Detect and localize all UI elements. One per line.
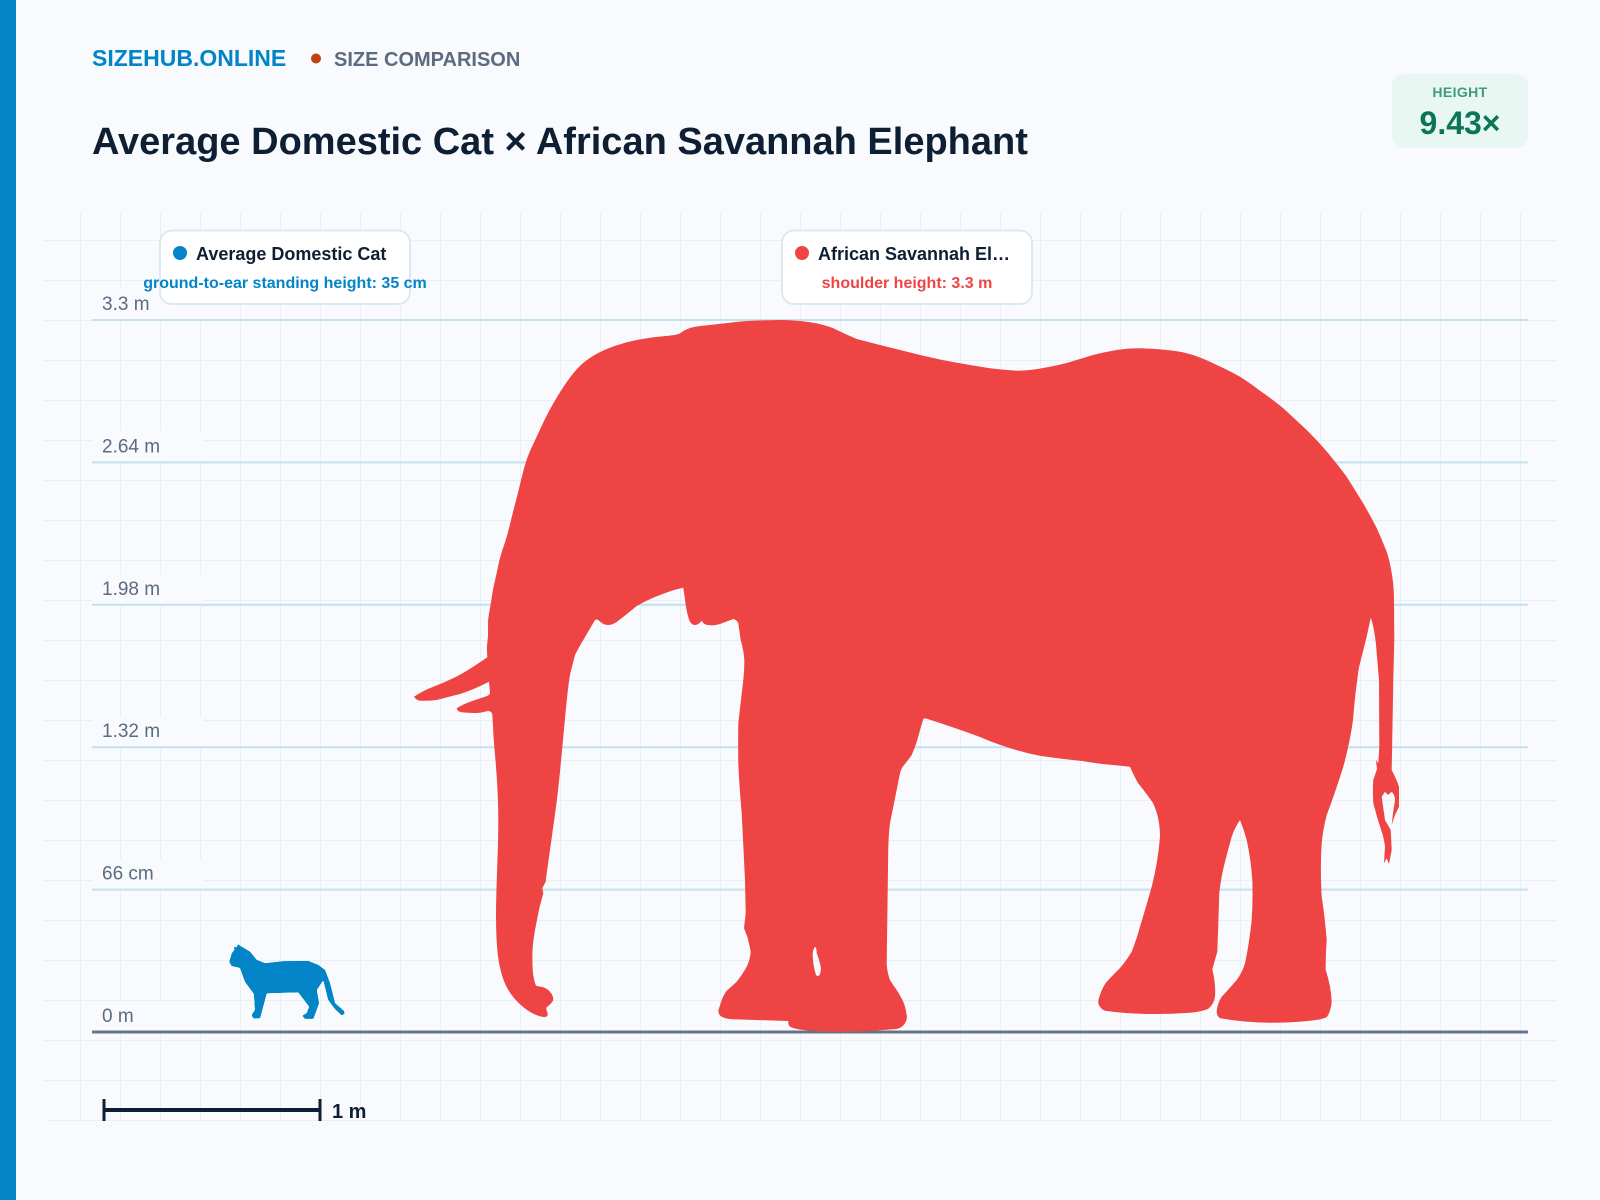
- title: Average Domestic Cat × African Savannah Elephant: [92, 121, 1028, 163]
- height ratio badge: 9.43×: [1420, 105, 1500, 141]
- height ratio badge: HEIGHT: [1432, 84, 1488, 100]
- height ratio badge: [1392, 74, 1528, 148]
- left accent bar: [0, 0, 16, 1200]
- elephant silhouette: [414, 320, 1399, 1032]
- label card: Average Domestic Cat: ground-to-ear standing height: 35 cm: [143, 275, 427, 292]
- label card: African Savannah Elephant: African Savannah El…: [818, 244, 1010, 264]
- label card: African Savannah Elephant: [782, 230, 1032, 304]
- ground line: [92, 1030, 1528, 1034]
- axis reference lines and labels: 3.3 m: [102, 294, 150, 315]
- axis reference lines and labels: 0 m: [102, 1006, 134, 1027]
- header brand line: SIZE COMPARISON: [334, 49, 520, 71]
- label card: Average Domestic Cat: Average Domestic Cat: [196, 244, 386, 264]
- axis reference lines and labels: 66 cm: [102, 864, 154, 885]
- header brand line: SIZEHUB.ONLINE: [92, 45, 286, 71]
- header brand line: [92, 45, 520, 71]
- axis reference lines and labels: [92, 289, 1528, 1032]
- axis reference lines and labels: 1.32 m: [102, 721, 160, 742]
- label card: African Savannah Elephant: shoulder height: 3.3 m: [822, 275, 992, 292]
- label card: Average Domestic Cat: [143, 230, 427, 304]
- scale bar: 1 m: 1 m: [332, 1101, 366, 1123]
- axis reference lines and labels: 1.98 m: [102, 579, 160, 600]
- cat silhouette: [229, 944, 344, 1019]
- axis reference lines and labels: 2.64 m: [102, 436, 160, 457]
